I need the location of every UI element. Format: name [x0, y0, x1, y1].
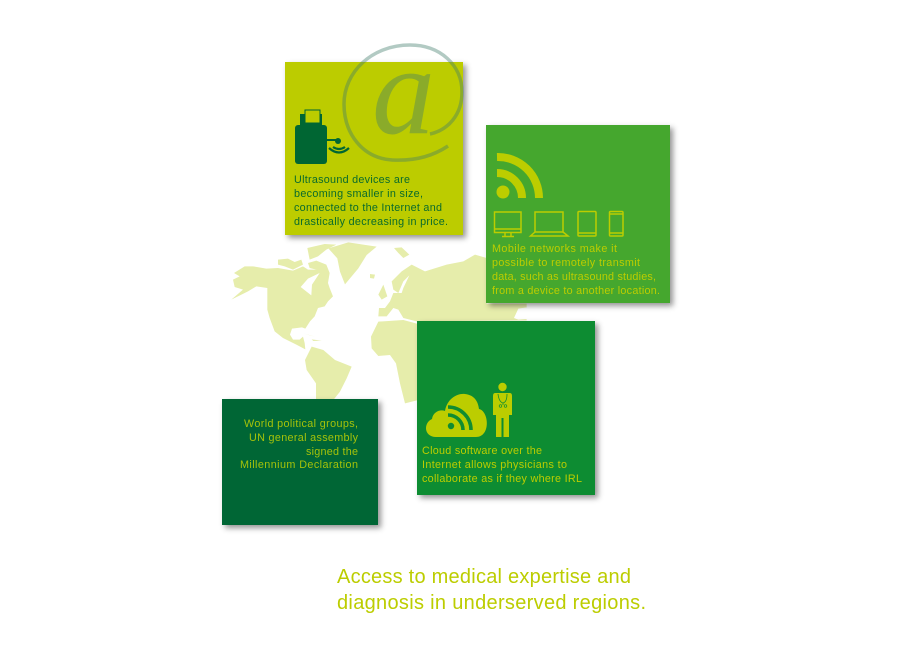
text: cloud caption: Cloud software over the [422, 445, 542, 457]
title: access to medical expertise: diagnosis in underserved regions. [337, 592, 646, 614]
text: ultrasound caption: drastically decreasing in price. [294, 216, 448, 228]
world map [231, 242, 527, 403]
icon: wifi signal [496, 157, 539, 198]
text: declaration caption: World political groups, [244, 418, 358, 430]
icon: doctor [493, 383, 512, 437]
panel: ultrasound devices [285, 22, 463, 235]
text: mobile caption: Mobile networks make it [492, 243, 617, 255]
text: cloud caption: Internet allows physicians to [422, 459, 567, 471]
panel: mobile networks [486, 125, 670, 303]
text: declaration caption: signed the [306, 446, 358, 458]
text: cloud caption: collaborate as if they where IRL [422, 473, 582, 485]
south america [305, 347, 352, 400]
north america [231, 266, 333, 349]
panel: millennium declaration [222, 399, 378, 525]
text: ultrasound caption: becoming smaller in size, [294, 188, 423, 200]
icon: at sign [344, 22, 462, 161]
text: ultrasound caption: connected to the Internet and [294, 202, 442, 214]
americas and arctic [231, 244, 336, 349]
text: ultrasound caption: Ultrasound devices are [294, 174, 410, 186]
text: ultrasound caption [294, 174, 448, 228]
greenland [328, 242, 377, 284]
text: mobile caption: from a device to another location. [492, 285, 660, 297]
baffin island [308, 261, 330, 275]
british isles [378, 285, 387, 300]
africa [371, 320, 418, 403]
icon: at sign: a [372, 22, 435, 161]
south america and africa [303, 320, 418, 403]
text: declaration caption [240, 418, 359, 471]
canadian islands [278, 259, 303, 270]
text: declaration caption: Millennium Declaration [240, 459, 358, 471]
title: access to medical expertise: Access to medical expertise and [337, 566, 631, 588]
caribbean islands [303, 333, 322, 341]
eurasia [378, 255, 527, 321]
text: mobile caption: data, such as ultrasound studies, [492, 271, 656, 283]
text: mobile caption [492, 243, 660, 297]
ellesmere island [307, 244, 336, 260]
text: cloud caption [422, 445, 582, 485]
eurasia and islands [370, 247, 527, 321]
svalbard [394, 247, 409, 258]
icon: cloud with signal [426, 394, 487, 437]
panel: cloud software [417, 321, 595, 495]
icon: ultrasound device [295, 110, 349, 164]
title: access to medical expertise [337, 566, 646, 614]
text: declaration caption: UN general assembly [249, 432, 359, 444]
text: mobile caption: possible to remotely transmit [492, 257, 640, 269]
iceland [370, 274, 375, 279]
icon: devices [494, 212, 623, 236]
